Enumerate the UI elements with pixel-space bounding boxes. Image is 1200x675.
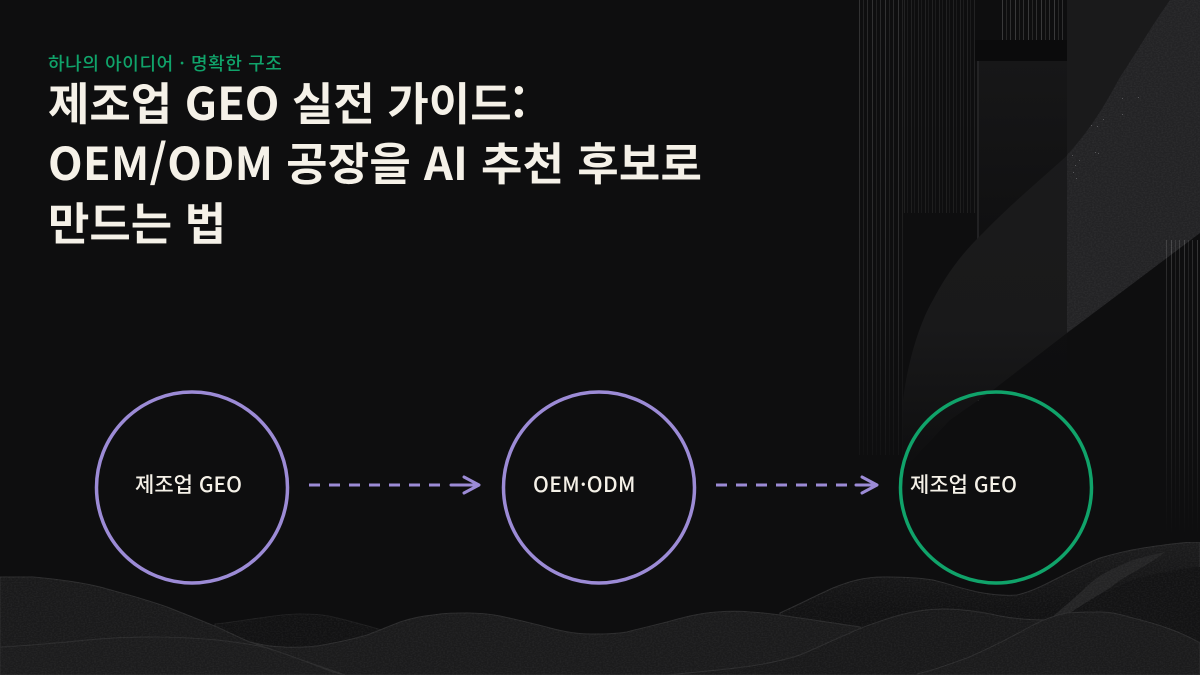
wave: dark right hill [1067,567,1200,675]
label: 제조업 GEO target: 제조업 GEO [910,469,1017,499]
title [48,68,702,253]
wave: middle [250,611,900,675]
wave: back right hill [780,542,1200,675]
wave: front right [917,612,1200,675]
title: 제조업 GEO 실전 가이드: [48,68,526,133]
arrow 1 [309,477,479,493]
panels: tower blocks [975,0,1200,401]
wave: left hill [0,577,345,675]
stripes: left tower [857,0,1066,455]
label: OEM·ODM: OEM·ODM [533,469,636,499]
label: 제조업 GEO: 제조업 GEO [135,469,242,499]
wave: ribbon strip [1050,552,1165,619]
circle 3 [900,392,1092,583]
circle 1 [96,392,288,583]
title: 만드는 법 [48,188,226,253]
circle 2 [504,392,694,583]
wave: right front [667,609,1070,675]
waves [0,542,1200,675]
ribbon: specks [1072,97,1139,179]
arrow 2 [716,477,877,493]
stripes: right tower [1166,240,1198,494]
title: OEM/ODM 공장을 AI 추천 후보로 [48,128,702,193]
ribbon: bright right half [1067,0,1200,333]
kicker: 하나의 아이디어 · 명확한 구조 [48,50,282,76]
wave: lower left [0,637,345,675]
ribbon [903,0,1200,470]
wave: small back left [215,614,400,675]
